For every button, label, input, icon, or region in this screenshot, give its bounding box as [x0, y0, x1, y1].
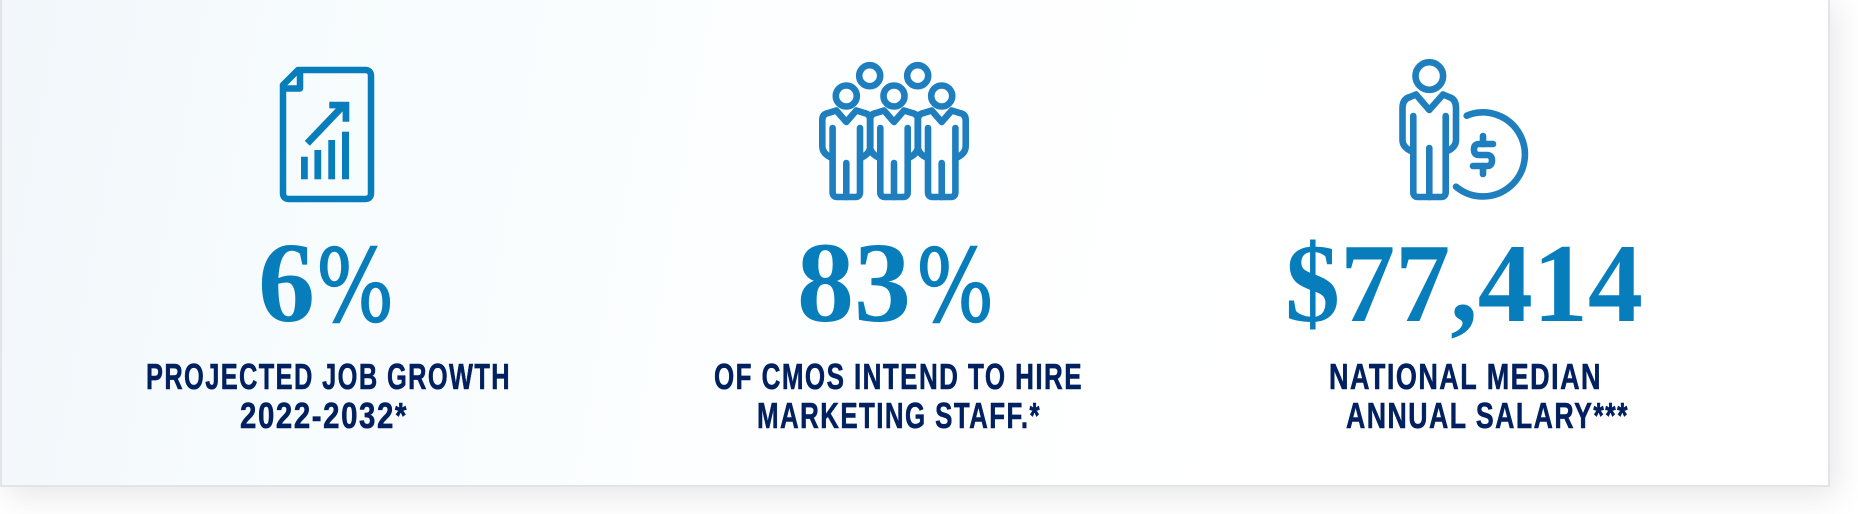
- stat: 83%: %: [916, 228, 994, 345]
- stat: 6%: [258, 219, 394, 346]
- label: CMOs intend to hire: MARKETING STAFF.*: [757, 395, 1041, 436]
- stat: 6%: 6: [258, 219, 315, 346]
- stat: $77,414: $77,414: [1285, 222, 1643, 346]
- icon: group of people: [822, 65, 966, 197]
- column: median salary: [1285, 62, 1643, 436]
- label: projected job growth: [146, 356, 511, 436]
- column: job growth: [146, 70, 511, 436]
- stat: 83%: [797, 219, 994, 346]
- label: national median annual salary: [1329, 356, 1629, 436]
- column: CMO hiring: [714, 65, 1083, 436]
- label: projected job growth: PROJECTED JOB GROWTH: [146, 356, 511, 397]
- label: national median annual salary: ANNUAL SALARY***: [1346, 395, 1629, 436]
- icon: document with growth chart: [283, 70, 371, 199]
- icon: person with dollar coin: [1402, 62, 1525, 197]
- label: national median annual salary: NATIONAL MEDIAN: [1329, 356, 1602, 397]
- stat: 6%: %: [316, 228, 394, 345]
- stat: 83%: 83: [797, 219, 911, 346]
- label: projected job growth: 2022-2032*: [240, 395, 408, 436]
- label: CMOs intend to hire: [714, 356, 1083, 436]
- label: CMOs intend to hire: OF CMOS INTEND TO HIRE: [714, 356, 1083, 397]
